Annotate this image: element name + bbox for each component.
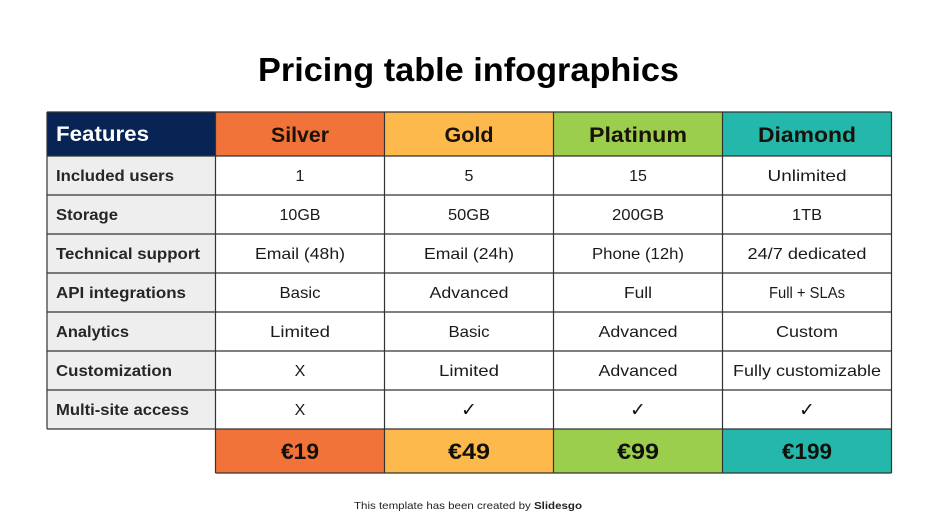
Silver values: Limited [270, 324, 330, 341]
Gold values: Limited [439, 363, 499, 380]
Silver values: X [295, 363, 306, 380]
Gold values: Basic [448, 324, 490, 341]
label: Technical support: Technical support [56, 246, 200, 263]
Diamond values: ✓ [799, 399, 815, 421]
Gold values: 5 [465, 168, 474, 185]
Silver values: Basic [280, 285, 320, 302]
header: Platinum [554, 112, 722, 156]
header: Platinum: Platinum [589, 124, 687, 147]
header: Features [47, 112, 216, 156]
header row [47, 112, 892, 156]
Diamond values: 24/7 dedicated [748, 246, 866, 263]
Gold values: 50GB [448, 207, 490, 224]
Platinum values: Full [624, 285, 652, 302]
Silver values: X [295, 402, 306, 419]
price: Gold [384, 429, 554, 473]
Silver values: 1 [296, 168, 305, 185]
header: Silver [216, 112, 384, 156]
label: Storage: Storage [56, 207, 118, 224]
footer credit: This template has been created by Slidesgo [354, 500, 582, 512]
price: Platinum [554, 429, 722, 473]
Diamond values: Unlimited [768, 168, 846, 185]
price row [216, 429, 892, 473]
header: Diamond [722, 112, 892, 156]
label: API integrations: API integrations [56, 285, 186, 302]
Silver values: Email (48h) [255, 246, 345, 263]
header: Diamond: Diamond [758, 124, 856, 147]
pricing table [47, 112, 892, 473]
price: Silver [216, 429, 384, 473]
Silver values: 10GB [280, 207, 320, 224]
label: Multi-site access: Multi-site access [56, 402, 189, 419]
header: Features: Features [56, 123, 149, 146]
Platinum values: Phone (12h) [592, 246, 684, 263]
Diamond values: 1TB [792, 207, 822, 224]
feature labels [56, 168, 200, 419]
title: Pricing table infographics [258, 51, 679, 88]
price: Diamond: €199 [782, 439, 832, 464]
price: Diamond [722, 429, 892, 473]
price: Platinum: €99 [617, 439, 659, 464]
label: Included users: Included users [56, 168, 174, 185]
Diamond values: Custom [776, 324, 838, 341]
Platinum values: 15 [629, 168, 647, 185]
Platinum values: 200GB [612, 207, 664, 224]
Platinum values: Advanced [598, 324, 678, 341]
Gold values: Email (24h) [424, 246, 514, 263]
Gold values [424, 168, 514, 421]
Silver values [255, 168, 345, 419]
price: Silver: €19 [281, 439, 319, 464]
price: Gold: €49 [448, 439, 490, 464]
header: Silver: Silver [271, 124, 329, 147]
Diamond values: Full + SLAs [769, 285, 845, 302]
header: Gold: Gold [444, 124, 494, 147]
Platinum values [592, 168, 684, 421]
feature label column background [47, 156, 216, 429]
Platinum values: Advanced [598, 363, 678, 380]
Gold values: Advanced [430, 285, 508, 302]
Diamond values [733, 168, 881, 421]
Gold values: ✓ [461, 399, 477, 421]
Platinum values: ✓ [630, 399, 646, 421]
label: Customization: Customization [56, 363, 172, 380]
Diamond values: Fully customizable [733, 363, 881, 380]
header: Gold [384, 112, 554, 156]
label: Analytics: Analytics [56, 324, 129, 341]
